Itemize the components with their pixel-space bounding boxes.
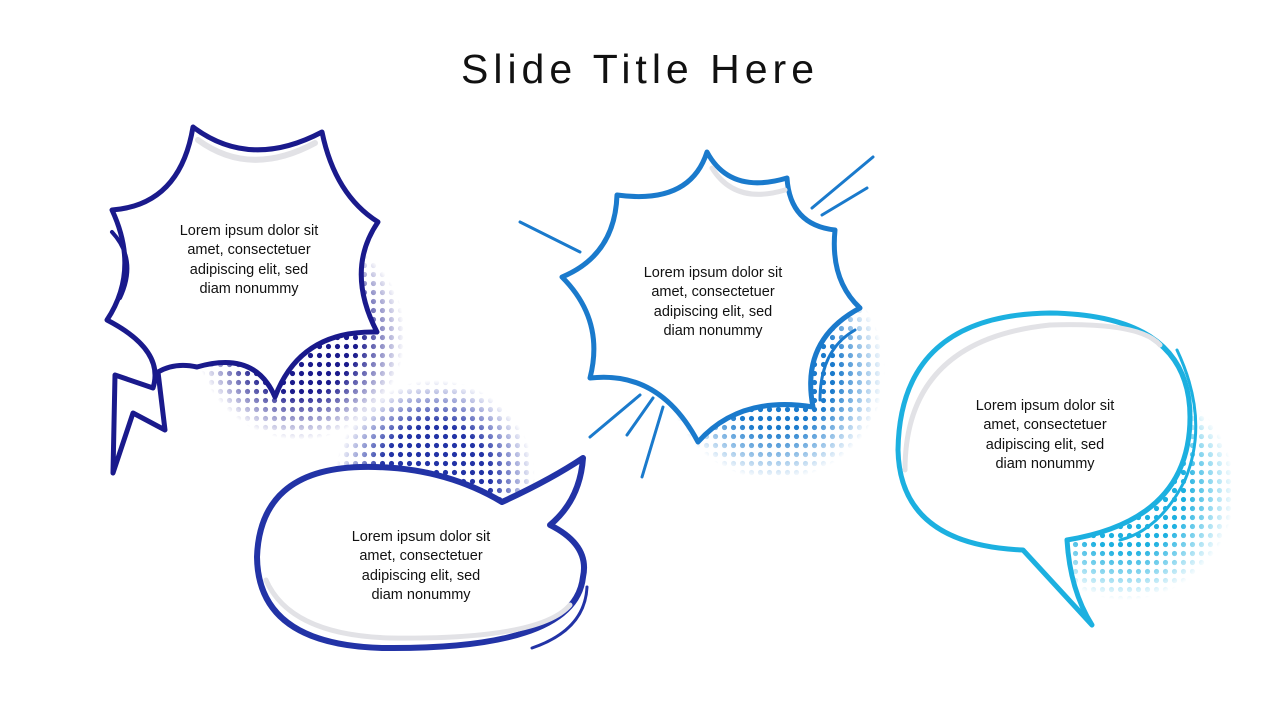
halftone: shape1 <box>204 256 403 438</box>
text: bubble 4: amet, consectetuer <box>983 417 1107 433</box>
text: bubble 4: adipiscing elit, sed <box>986 437 1104 453</box>
text: bubble 2: amet, consectetuer <box>359 548 483 564</box>
halftone: shape2 <box>338 382 534 498</box>
text: bubble 1: diam nonummy <box>199 281 299 297</box>
text: bubble 4: Lorem ipsum dolor sit <box>976 398 1114 414</box>
bubble 1: navy burst <box>107 127 378 473</box>
title: Slide Title Here <box>461 46 819 92</box>
text: bubble 2 <box>352 529 490 603</box>
text: bubble 4 <box>976 398 1114 472</box>
text: bubble 3: diam nonummy <box>663 323 763 339</box>
bubble 2: blue speech oval <box>257 458 587 648</box>
bubble 4: cyan speech oval <box>898 313 1196 625</box>
text: bubble 2: Lorem ipsum dolor sit <box>352 529 490 545</box>
text: bubble 3 <box>644 265 782 339</box>
text: bubble 3: adipiscing elit, sed <box>654 304 772 320</box>
text: bubble 1: adipiscing elit, sed <box>190 262 308 278</box>
text: bubble 1 <box>180 223 318 297</box>
halftone: shape4 <box>1072 407 1231 598</box>
text: bubble 2: adipiscing elit, sed <box>362 568 480 584</box>
text: bubble 3: Lorem ipsum dolor sit <box>644 265 782 281</box>
text: bubble 4: diam nonummy <box>995 456 1095 472</box>
text: bubble 1: Lorem ipsum dolor sit <box>180 223 318 239</box>
text: bubble 1: amet, consectetuer <box>187 242 311 258</box>
bubble 3: blue burst with rays <box>520 152 873 477</box>
halftone: shape3 <box>678 294 880 475</box>
text: bubble 2: diam nonummy <box>371 587 471 603</box>
text: bubble 3: amet, consectetuer <box>651 284 775 300</box>
